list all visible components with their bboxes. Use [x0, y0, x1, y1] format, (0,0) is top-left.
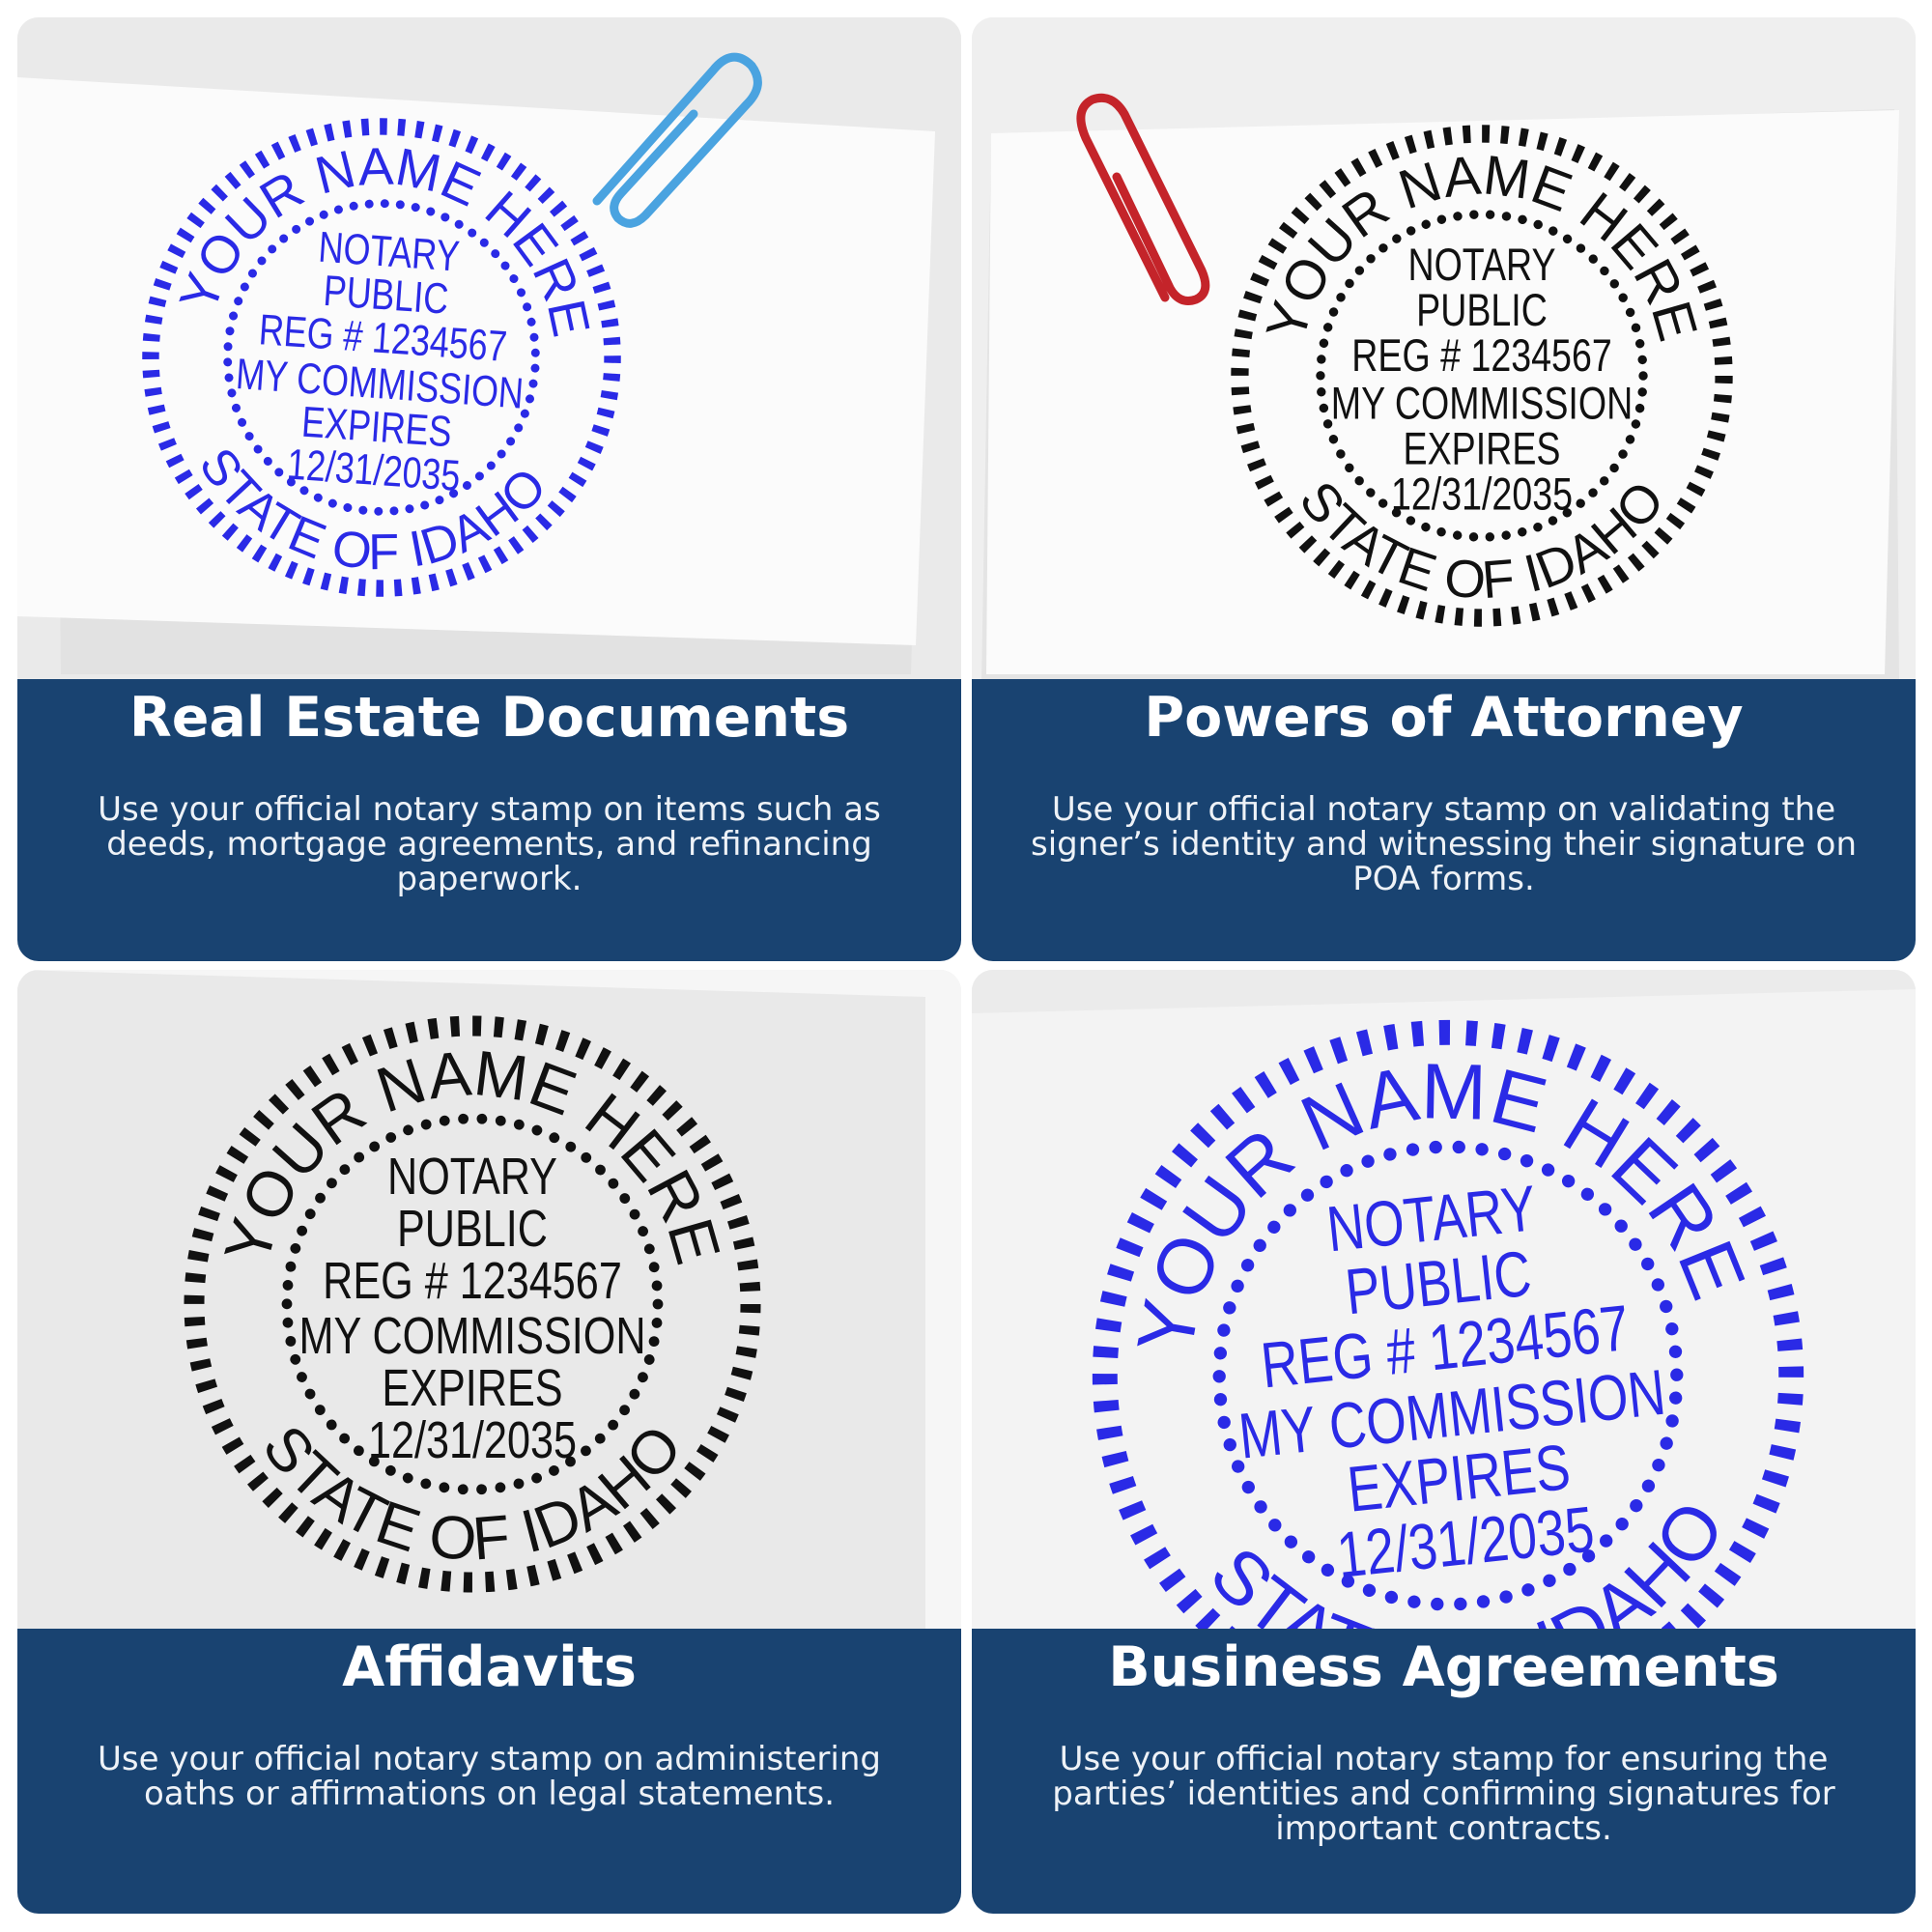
stamp: black: PUBLIC	[397, 1201, 548, 1258]
stamp: black	[1231, 125, 1733, 627]
stamp: black: YOUR NAME HERE	[224, 1051, 721, 1265]
band: real estate: Real Estate Documents	[129, 686, 849, 750]
icon: blue paperclip	[597, 57, 757, 223]
stamp: black: 12/31/2035	[1391, 469, 1573, 520]
stamp: black: YOUR NAME HERE	[1265, 156, 1697, 342]
stamp: black: MY COMMISSION	[298, 1308, 646, 1365]
stamp: black: STATE OF IDAHO	[1303, 484, 1659, 598]
panel: business agreements	[972, 970, 1916, 1914]
band: powers of attorney	[972, 679, 1916, 961]
panel: real estate documents	[17, 17, 961, 961]
stamp: black: EXPIRES	[382, 1360, 563, 1417]
stamp: black: 12/31/2035	[368, 1412, 577, 1469]
band: real estate	[17, 679, 961, 961]
stamp: blue: EXPIRES	[300, 397, 453, 456]
stamp: blue: MY COMMISSION	[235, 349, 526, 418]
stamp: blue large	[1092, 1020, 1804, 1629]
stamp: black: REG # 1234567	[1351, 330, 1612, 382]
icon: red paperclip	[1081, 98, 1206, 301]
band: business agreements: Use your official notary stamp for ensuring the parties’ identities and confirming signatures for important contracts.	[1052, 1740, 1835, 1848]
stamp: black: EXPIRES	[1404, 423, 1560, 474]
stamp: black: REG # 1234567	[323, 1253, 622, 1310]
panel: powers of attorney	[972, 17, 1916, 961]
stamp: black: PUBLIC	[1416, 285, 1548, 336]
stamp: blue: YOUR NAME HERE	[179, 148, 589, 337]
stamp: black: NOTARY	[1407, 240, 1556, 291]
band: powers of attorney: Use your official notary stamp on validating the signer’s identity and witnessing their signature on POA forms.	[1031, 790, 1857, 898]
band: powers of attorney: Powers of Attorney	[1144, 686, 1744, 750]
stamp: blue large: EXPIRES	[1344, 1430, 1574, 1525]
stamp: black	[184, 1016, 761, 1592]
stamp: blue large: NOTARY	[1323, 1171, 1540, 1265]
stamp: black: NOTARY	[387, 1149, 557, 1206]
band: affidavits: Use your official notary stamp on administering oaths or affirmations on legal statements.	[98, 1740, 881, 1813]
band: business agreements	[972, 1629, 1916, 1914]
band: affidavits: Affidavits	[342, 1635, 637, 1699]
stamp: blue: REG # 1234567	[257, 304, 508, 371]
stamp: blue large: YOUR NAME HERE	[1137, 1064, 1745, 1347]
stamp: blue: STATE OF IDAHO	[203, 450, 541, 570]
stamp: black: MY COMMISSION	[1331, 378, 1633, 429]
stamp: blue large: REG # 1234567	[1258, 1291, 1633, 1402]
stamp: blue large: MY COMMISSION	[1236, 1355, 1668, 1472]
band: affidavits	[17, 1629, 961, 1914]
stamp: blue: 12/31/2035	[286, 440, 462, 500]
band: business agreements: Business Agreements	[1108, 1635, 1779, 1699]
stamp: black: STATE OF IDAHO	[267, 1429, 676, 1559]
stamp: blue: NOTARY	[317, 222, 461, 281]
band: real estate: Use your official notary stamp on items such as deeds, mortgage agreements, and refinancing paperwork.	[98, 790, 881, 898]
stamp: blue: PUBLIC	[322, 266, 450, 324]
panel: affidavits	[17, 970, 961, 1914]
stamp: blue large: 12/31/2035	[1334, 1492, 1598, 1591]
stamp: blue large: PUBLIC	[1342, 1236, 1534, 1328]
stamp: blue	[142, 118, 621, 597]
